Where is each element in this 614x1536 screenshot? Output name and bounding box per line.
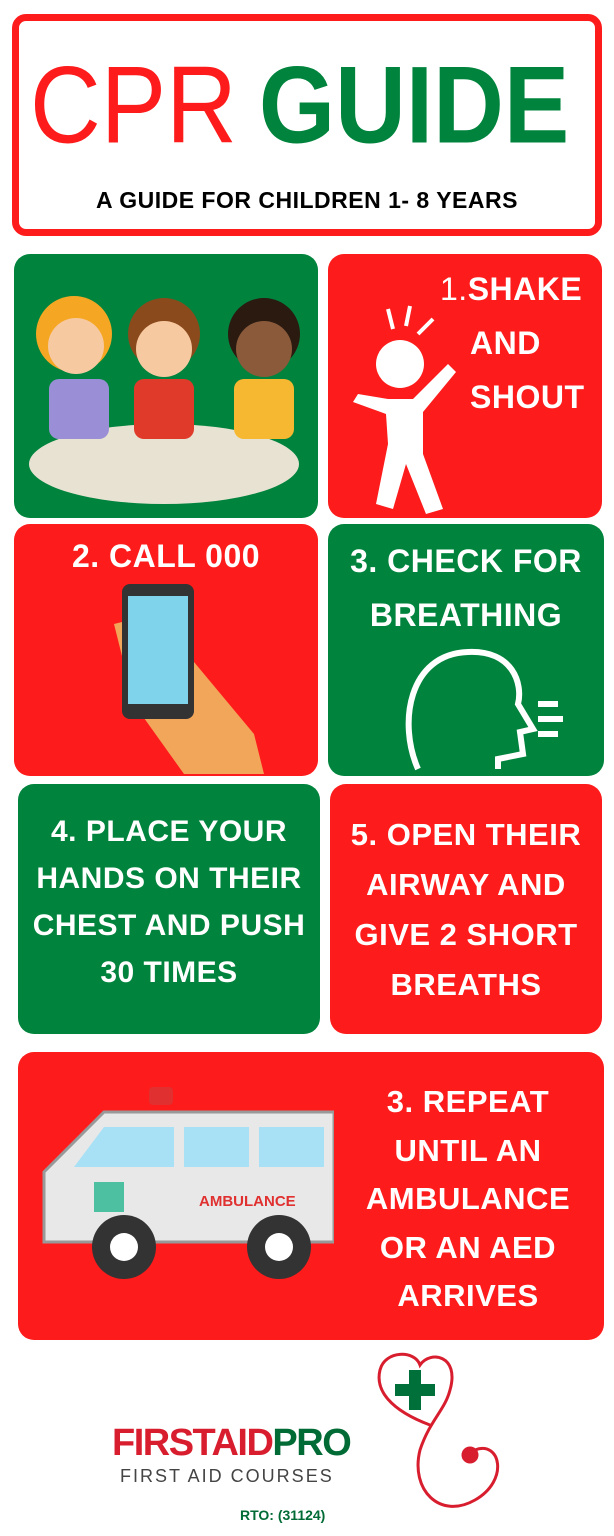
text: GIVE 2 SHORT bbox=[354, 917, 578, 952]
brand name: FIRSTAIDPRO bbox=[112, 1422, 350, 1464]
panel: step 1 shake and shout bbox=[328, 254, 602, 518]
icon: shouting person bbox=[353, 306, 456, 514]
text: CHEST AND PUSH bbox=[33, 909, 305, 942]
text bbox=[33, 815, 305, 989]
panel: step 2 call 000 bbox=[14, 524, 318, 776]
text: 3. CHECK FOR bbox=[350, 543, 582, 579]
text: 30 TIMES bbox=[100, 956, 238, 989]
text: BREATHING bbox=[370, 597, 562, 633]
text: BREATHS bbox=[390, 967, 542, 1002]
text: 5. OPEN THEIR bbox=[351, 817, 581, 852]
subtitle: A GUIDE FOR CHILDREN 1- 8 YEARS bbox=[96, 187, 518, 213]
rto: RTO: (31124) bbox=[240, 1507, 325, 1523]
text: OR AN AED bbox=[380, 1230, 556, 1264]
text: AND bbox=[470, 325, 541, 361]
title box bbox=[12, 14, 602, 236]
text bbox=[440, 271, 584, 415]
icon: phone in hand bbox=[114, 584, 264, 774]
text: 4. PLACE YOUR bbox=[51, 815, 287, 848]
icon: head breathing bbox=[406, 648, 563, 770]
text bbox=[366, 1084, 570, 1313]
text: AIRWAY AND bbox=[366, 867, 566, 902]
text: HANDS ON THEIR bbox=[36, 862, 302, 895]
text: UNTIL AN bbox=[395, 1132, 541, 1168]
text: 2. CALL 000 bbox=[72, 538, 260, 574]
icon: ambulance bbox=[42, 1087, 334, 1279]
text: SHOUT bbox=[470, 379, 584, 415]
text bbox=[350, 543, 582, 633]
panel: step 3 check breathing bbox=[328, 524, 604, 776]
icon: ambulance: AMBULANCE bbox=[199, 1193, 296, 1210]
text bbox=[351, 817, 581, 1002]
panel: step 5 open airway bbox=[330, 784, 602, 1034]
text: AMBULANCE bbox=[366, 1181, 570, 1216]
title: CPRGUIDE bbox=[30, 43, 569, 166]
panel: children illustration bbox=[14, 254, 318, 518]
panel: repeat until ambulance bbox=[18, 1052, 604, 1340]
text: 1.SHAKE bbox=[440, 271, 582, 307]
text: ARRIVES bbox=[397, 1278, 539, 1313]
tagline: FIRST AID COURSES bbox=[120, 1466, 334, 1486]
logo bbox=[112, 1352, 500, 1523]
icon: stethoscope heart bbox=[378, 1352, 500, 1508]
panel: step 4 hands on chest bbox=[18, 784, 320, 1034]
text: 3. REPEAT bbox=[387, 1084, 549, 1119]
